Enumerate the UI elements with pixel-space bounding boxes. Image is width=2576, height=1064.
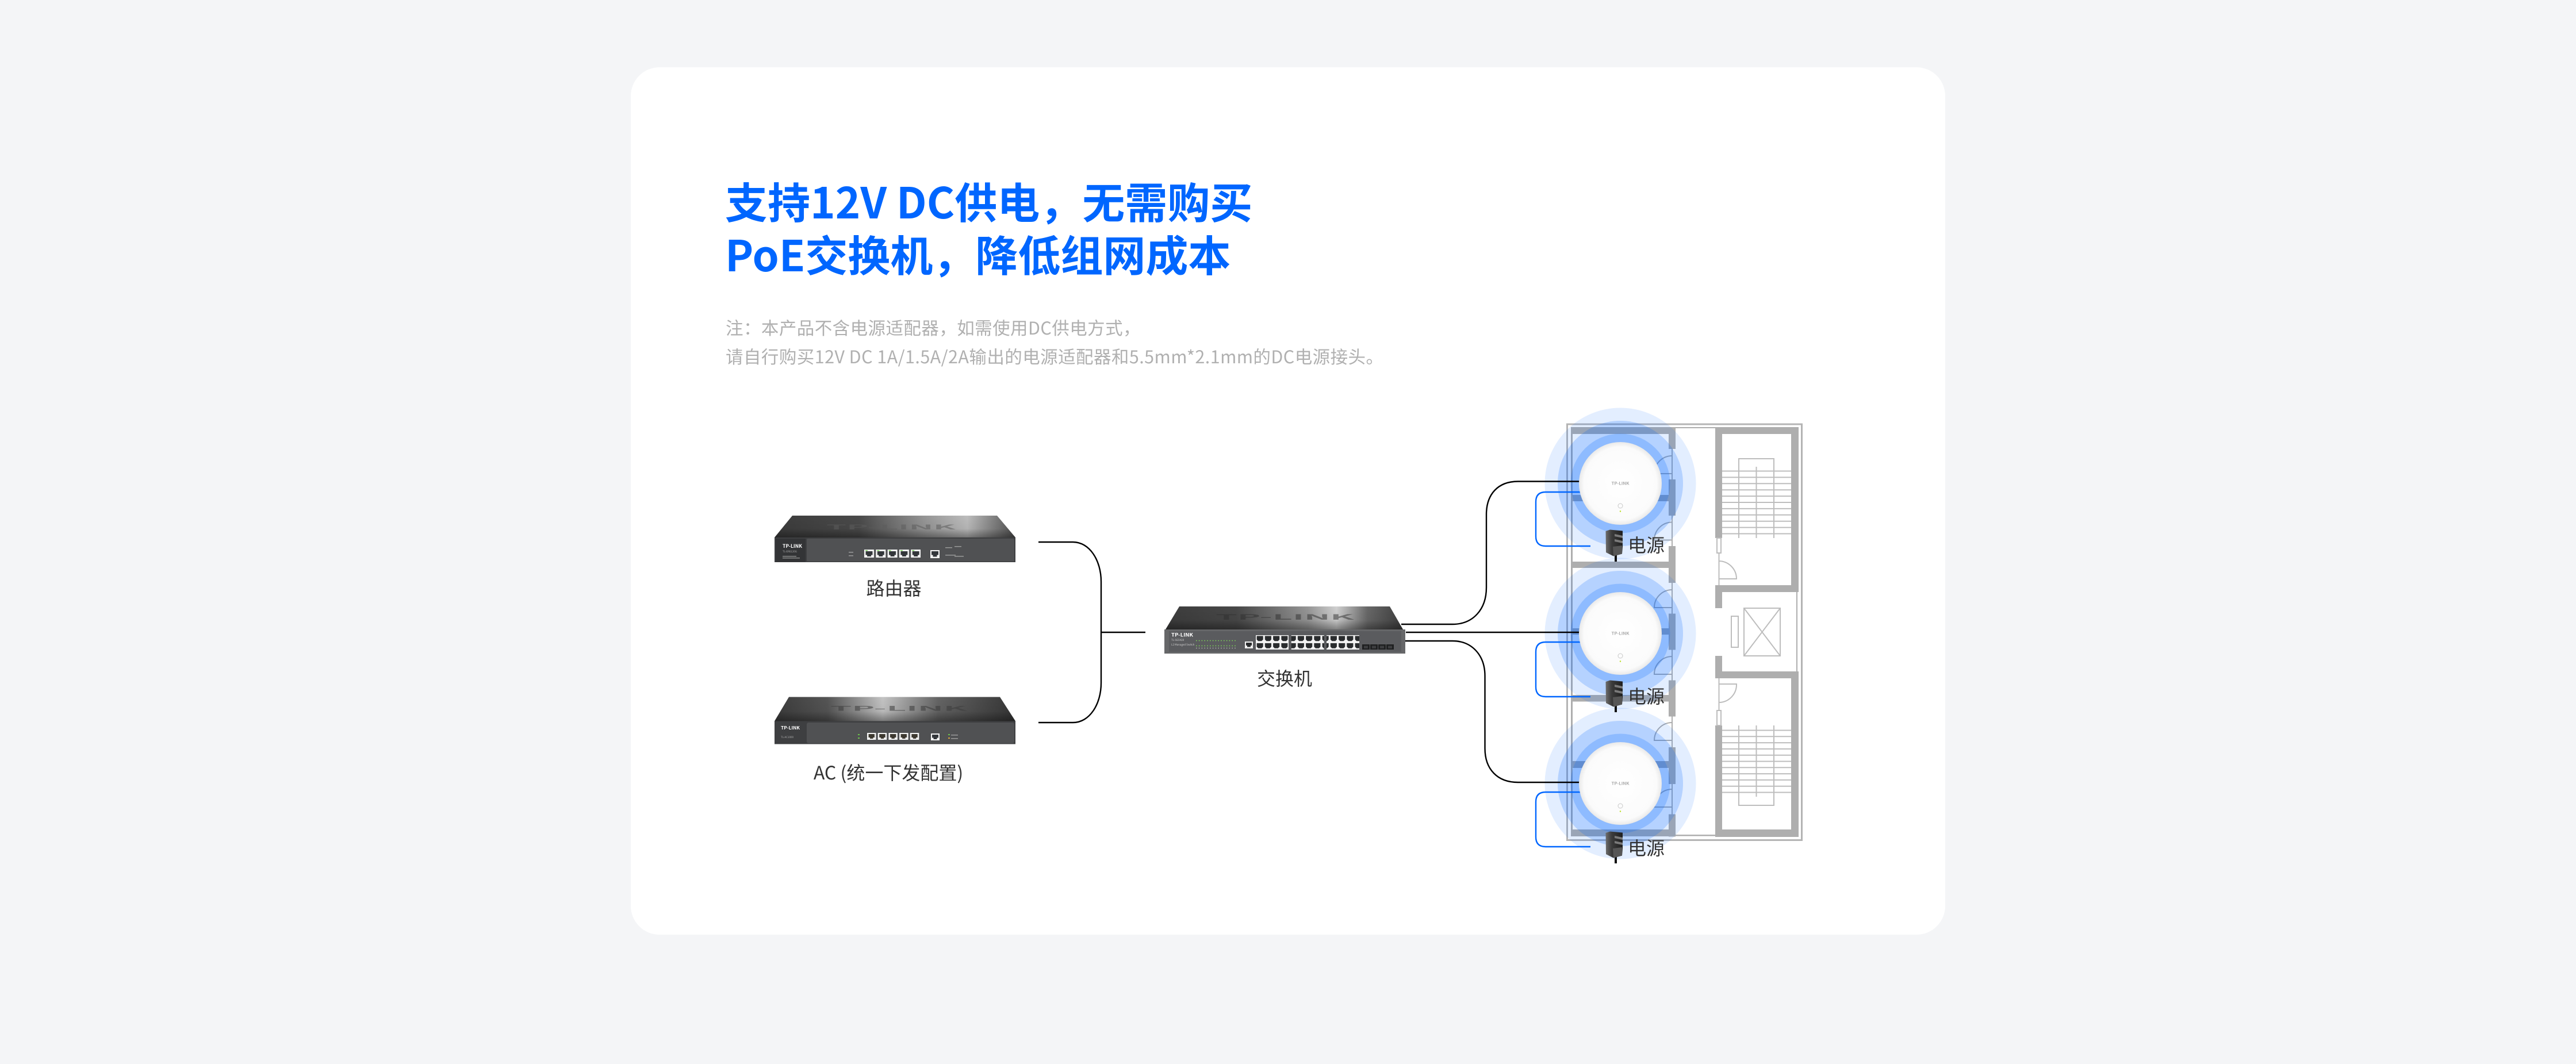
upper stairs [1722,459,1791,538]
label: power 3: 电源 [1628,834,1665,861]
title [725,170,1252,284]
icon: access point 2 [1579,592,1662,675]
label: AC: AC (统一下发配置) [814,759,963,785]
label: switch: 交换机 [1257,664,1312,691]
label: router: 路由器 [866,574,922,601]
icon: switch device [1164,606,1405,654]
icon: access point 2: TP-LINK [1611,631,1630,637]
floor plan [1567,424,1802,840]
icon: power adapter 3 [1605,831,1623,863]
icon: power adapter 2 [1605,681,1623,712]
signal coverage 1 [1544,408,1696,559]
icon: access point 3 [1579,742,1662,825]
icon: router device: TP-LINK [783,543,802,550]
text block: note: 注：本产品不含电源适配器，如需使用DC供电方式， [726,314,1141,340]
cables: power to access points [1536,492,1590,847]
icon: access point 1: TP-LINK [1611,481,1630,486]
stair doors [1717,538,1736,725]
room doors [1654,456,1672,807]
icon: access point 3: TP-LINK [1611,781,1630,786]
signal coverage 2 [1544,558,1696,709]
text block: note: 请自行购买12V DC 1A/1.5A/2A输出的电源适配器和5.5mm*2.1mm的DC电源接头。 [726,343,1383,368]
icon: router device: TP-LINK [826,523,957,532]
panel: white card [631,67,1945,935]
icon: router device [775,516,1015,562]
lift [1731,608,1780,656]
outer frame [1567,424,1802,840]
arrow: bracket from router and AC to switch [1038,542,1145,723]
signal coverage 3 [1544,708,1696,859]
title: PoE交换机，降低组网成本 [725,222,1230,284]
icon: switch device: TP-LINK [1171,631,1193,638]
icon: switch device: TL-SG5428 [1171,639,1184,642]
lower stairs [1722,725,1791,805]
icon: router device: TL-ER6120G [783,550,797,554]
title: 支持12V DC供电，无需购买 [725,170,1252,231]
icon: AC device [775,697,1015,744]
icon: power adapter 1 [1605,530,1623,562]
cables: switch to access points [1401,482,1580,782]
icon: switch device: TP-LINK [1216,611,1354,622]
label: power 1: 电源 [1628,531,1665,558]
stairwell and lift walls [1715,427,1799,837]
left room walls [1571,427,1716,837]
icon: access point 1 [1579,442,1662,525]
icon: switch device: L2 Managed Switch [1171,643,1195,647]
icon: AC device: TP-LINK [830,704,968,713]
icon: AC device: TP-LINK [781,725,800,731]
label: power 2: 电源 [1628,682,1665,709]
icon: AC device: TL-AC1000 [781,736,793,739]
text block: note [726,314,1383,368]
